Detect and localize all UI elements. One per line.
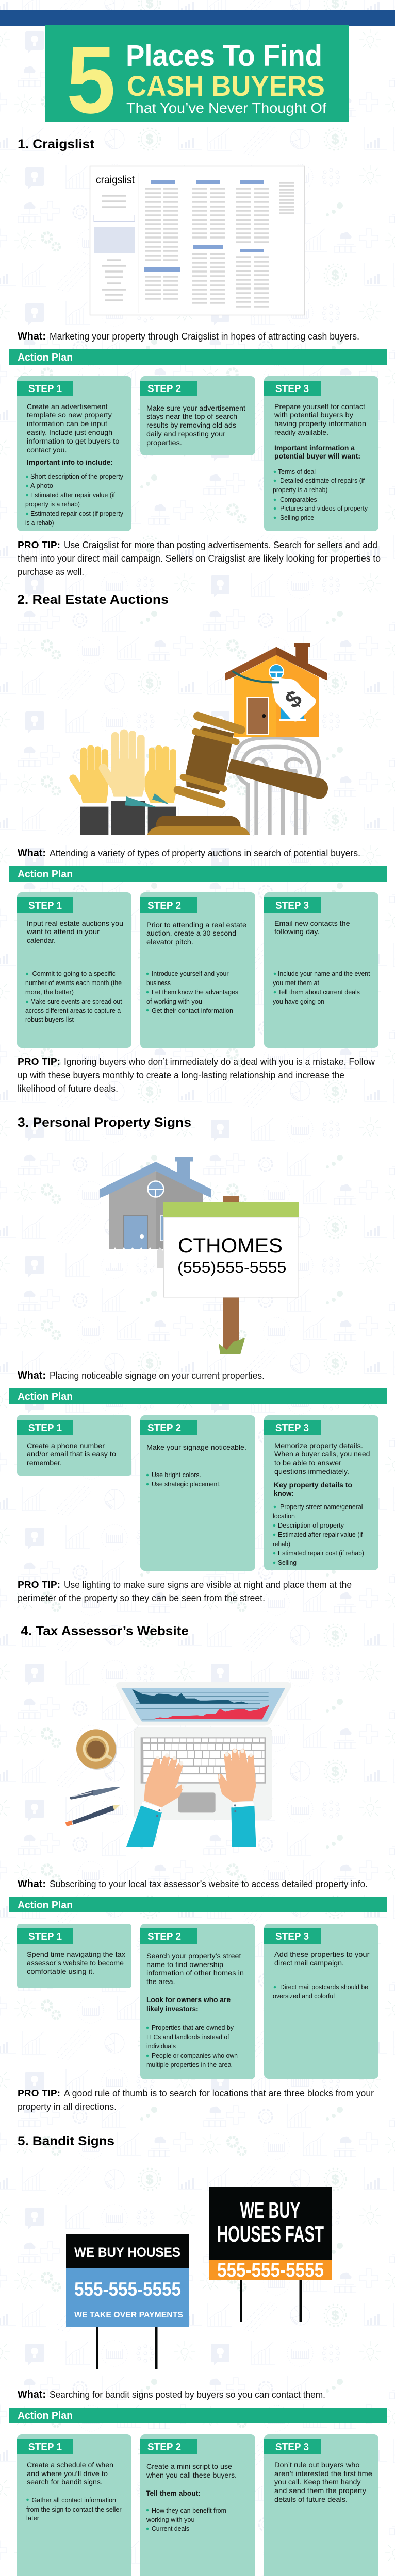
step 2 card: LLCs and landlords instead of	[146, 2033, 229, 2041]
section 5: Bandit Signs	[9, 2134, 387, 2576]
step 3 card: aren’t interested the first time	[274, 2469, 372, 2478]
step 1 card: Input real estate auctions you	[27, 919, 123, 927]
step 3 card	[264, 1924, 378, 2079]
illustration: for-sale style sign: CTHOMES	[178, 1234, 283, 1257]
step 2 card	[140, 2434, 255, 2576]
illustration: bandit sign, we buy houses	[66, 2234, 189, 2369]
action plan bar: Action Plan	[18, 352, 73, 363]
step 1 card: Spend time navigating the tax	[27, 1950, 125, 1958]
step 3 card: STEP 3	[275, 900, 309, 911]
pro tip: PRO TIP:	[18, 2088, 60, 2098]
step 3 card: Pictures and videos of property	[280, 505, 368, 512]
step 3 card: readily available.	[274, 428, 328, 436]
step 3 card: Don’t rule out buyers who	[274, 2461, 360, 2469]
step 2 card: the area.	[146, 1977, 175, 1986]
action plan bar	[9, 2408, 387, 2423]
step 3 card	[264, 1415, 378, 1570]
step 1 card: Short description of the property	[30, 473, 124, 480]
step 3 card: Prepare yourself for contact	[274, 402, 365, 411]
illustration: auction gavel, hands, house on column	[73, 643, 328, 835]
title line: CASH BUYERS: CASH BUYERS	[127, 70, 325, 102]
step 2 card: daily and reposting your	[146, 430, 225, 438]
pro tip: Ignoring buyers who don’t immediately do a deal with you is a mistake. Follow	[64, 1057, 375, 1067]
step 1 card: number of events each month (the	[25, 979, 122, 987]
step 2 card: multiple properties in the area	[146, 2061, 232, 2069]
step 1 card: remember.	[27, 1459, 62, 1467]
step 2 card: stays near the top of search	[146, 412, 237, 420]
step 3 card: questions immediately.	[274, 1467, 349, 1476]
step 1 card: A photo	[30, 482, 53, 489]
step 3 card	[264, 376, 378, 531]
step 3 card: Estimated repair cost (if rehab)	[278, 1550, 364, 1557]
step 1 card: from the sign to contact the seller	[26, 2506, 122, 2513]
step 1 card: more, the better)	[25, 989, 74, 996]
step 1 card: Create an advertisement	[27, 402, 108, 411]
what statement: What:	[18, 331, 46, 342]
action plan bar: Action Plan	[18, 1900, 73, 1911]
step 1 card: and/or email that is easy to	[27, 1450, 116, 1458]
step 3 card: location	[273, 1513, 295, 1520]
step 1 card	[17, 1924, 131, 1988]
step 2 card	[140, 376, 255, 455]
step 1 card: Gather all contact information	[32, 2497, 116, 2504]
step 2 card: How they can benefit from	[152, 2507, 226, 2514]
step 3 card: STEP 3	[275, 383, 309, 395]
step 1 card	[17, 376, 131, 531]
step 3 card: rehab)	[273, 1540, 290, 1548]
step 3 card: you have going on	[273, 998, 324, 1005]
step 3 card: STEP 3	[275, 1931, 309, 1942]
step 2 card: Introduce yourself and your	[152, 970, 229, 977]
pro tip	[18, 2088, 374, 2112]
what statement: Marketing your property through Craigslist in hopes of attracting cash buyers.	[50, 331, 359, 342]
step 2 card: of working with you	[146, 998, 202, 1005]
what statement: What:	[18, 1878, 46, 1890]
step 2 card: Current deals	[152, 2525, 189, 2532]
step 3 card	[264, 2434, 378, 2576]
step 1 card: Create a schedule of when	[27, 2461, 113, 2469]
step 1 card: search for bandit signs.	[27, 2478, 103, 2486]
step 3 card: with potential buyers by	[274, 411, 353, 419]
step 1 card: Estimated after repair value (if	[30, 492, 116, 499]
step 3 card: direct mail campaign.	[274, 1959, 344, 1967]
step 2 card: Make sure your advertisement	[146, 404, 245, 412]
step 3 card: potential buyer will want:	[274, 452, 360, 460]
step 2 card: business	[146, 979, 171, 987]
step 1 card: robust buyers list	[25, 1016, 74, 1023]
step 2 card: Create a mini script to use	[146, 2462, 232, 2470]
illustration: auction gavel, hands, house on column: $	[280, 685, 307, 714]
title line: Places To Find: Places To Find	[126, 39, 322, 73]
pro tip: purchase as well.	[18, 567, 84, 577]
step 2 card: Use strategic placement.	[152, 1481, 221, 1488]
illustration: bandit sign, we buy houses fast: WE BUY	[240, 2198, 300, 2223]
step 1 card: easily. Include just enough	[27, 428, 112, 436]
step 2 card	[140, 892, 255, 1048]
pro tip: perimeter of the property so they can be seen from the street.	[18, 1593, 265, 1603]
step 3 card: Selling	[278, 1559, 297, 1566]
pro tip: A good rule of thumb is to search for locations that are three blocks from your	[64, 2088, 374, 2098]
pro tip	[18, 1056, 375, 1094]
pro tip: Use lighting to make sure signs are visible at night and place them at the	[64, 1580, 352, 1590]
step 3 card: Terms of deal	[278, 468, 316, 476]
step 3 card: Direct mail postcards should be	[280, 1984, 368, 1991]
illustration: laptop, hands, coffee and pens	[65, 1682, 291, 1847]
step 2 card: Let them know the advantages	[152, 989, 238, 996]
illustration: bandit sign, we buy houses: 555-555-5555	[74, 2279, 181, 2300]
step 1 card	[17, 892, 131, 1048]
step 3 card: details of future deals.	[274, 2495, 348, 2503]
section 2: Real Estate Auctions	[9, 592, 387, 1094]
step 2 card: STEP 2	[147, 1931, 181, 1942]
what statement: What:	[18, 1370, 46, 1381]
illustration: bandit sign, we buy houses: WE TAKE OVER PAYMENTS	[74, 2311, 183, 2319]
pro tip	[18, 1579, 352, 1603]
action plan bar: Action Plan	[18, 869, 73, 880]
step 2 card	[140, 1415, 255, 1571]
step 1 card: assessor’s website to become	[27, 1959, 124, 1967]
step 2 card: Prior to attending a real estate	[146, 921, 246, 929]
step 1 card: Important info to include:	[27, 458, 113, 466]
step 3 card: you call. Keep them handy	[274, 2478, 361, 2486]
step 3 card: Tell them about current deals	[278, 989, 360, 996]
step 1 card: later	[26, 2515, 39, 2522]
step 2 card: People or companies who own	[152, 2052, 238, 2059]
step 3 card: Key property details to	[274, 1481, 352, 1489]
step 3 card: Comparables	[280, 496, 317, 503]
step 3 card: Description of property	[278, 1522, 344, 1529]
step 1 card: STEP 1	[28, 1422, 62, 1434]
step 3 card: STEP 3	[275, 2442, 309, 2453]
step 1 card: Make sure events are spread out	[30, 998, 122, 1005]
step 2 card: Use bright colors.	[152, 1471, 201, 1479]
pro tip: property in all directions.	[18, 2102, 117, 2112]
title line: That You've Never Thought Of: That You’ve Never Thought Of	[126, 100, 326, 116]
step 1 card: across different areas to capture a	[25, 1007, 121, 1014]
section 4: Tax Assessor's Website	[9, 1624, 387, 2112]
step 1 card: information to get buyers to	[27, 437, 120, 445]
pro tip: Use Craigslist for more than posting advertisements. Search for sellers and add	[64, 540, 377, 550]
step 1 card: calendar.	[27, 936, 56, 944]
section 3: Personal Property Signs	[9, 1115, 387, 1603]
step 2 card: when you call these buyers.	[146, 2471, 237, 2479]
pro tip	[18, 539, 381, 577]
illustration: bandit sign, we buy houses fast	[209, 2187, 332, 2322]
step 3 card: to be able to answer	[274, 1459, 341, 1467]
step 3 card: know:	[274, 1489, 294, 1497]
action plan bar	[9, 1388, 387, 1404]
step 2 card: STEP 2	[147, 1422, 181, 1434]
step 2 card: Properties that are owned by	[152, 2024, 234, 2031]
step 1 card: STEP 1	[28, 383, 62, 395]
step 3 card: following day.	[274, 927, 320, 936]
illustration: bandit sign, we buy houses fast: 555-555-5555	[217, 2260, 324, 2281]
heading: 4. Tax Assessor's Website: 4. Tax Assessor’s Website	[21, 1624, 189, 1638]
step 3 card: Selling price	[280, 514, 314, 521]
step 2 card: auction, create a 30 second	[146, 929, 236, 937]
action plan bar	[9, 866, 387, 882]
illustration: bandit sign, we buy houses: WE BUY HOUSES	[74, 2245, 180, 2260]
illustration: bandit sign, we buy houses fast: HOUSES FAST	[217, 2222, 324, 2247]
action plan bar: Action Plan	[18, 1391, 73, 1402]
step 2 card: working with you	[146, 2516, 195, 2523]
step 3 card: Memorize property details.	[274, 1442, 363, 1450]
step 1 card: information can be input	[27, 419, 107, 428]
what statement: Placing noticeable signage on your current properties.	[50, 1370, 265, 1381]
step 3 card: STEP 3	[275, 1422, 309, 1434]
step 1 card: and where you’ll drive to	[27, 2469, 108, 2478]
step 3 card: you met them at	[273, 979, 320, 987]
heading: 3. Personal Property Signs: 3. Personal Property Signs	[18, 1115, 191, 1130]
step 2 card: Make your signage noticeable.	[146, 1443, 246, 1451]
step 2 card: Look for owners who are	[146, 1995, 231, 2004]
what statement: Attending a variety of types of property auctions in search of potential buyers.	[50, 848, 360, 858]
title banner	[45, 25, 349, 133]
what statement: What:	[18, 848, 46, 859]
step 3 card: When a buyer calls, you need	[274, 1450, 370, 1458]
step 1 card: comfortable using it.	[27, 1967, 94, 1975]
step 3 card: Estimated after repair value (if	[278, 1531, 363, 1538]
what statement: What:	[18, 2389, 46, 2400]
step 2 card: STEP 2	[147, 900, 181, 911]
pro tip: them into your direct mail campaign. Sellers on Craigslist are likely looking for properties to	[18, 553, 381, 564]
step 2 card: individuals	[146, 2043, 176, 2050]
illustration: gray house	[100, 1157, 211, 1268]
step 3 card: Email new contacts the	[274, 919, 350, 927]
illustration: craigslist web page: craigslist	[96, 174, 135, 186]
step 1 card	[17, 1415, 131, 1476]
step 1 card: Create a phone number	[27, 1442, 105, 1450]
step 1 card: template so new property	[27, 411, 112, 419]
section 1: Craigslist	[9, 137, 387, 577]
step 2 card: properties.	[146, 438, 182, 447]
step 3 card: property is a rehab)	[273, 486, 328, 494]
step 2 card	[140, 1924, 255, 2079]
step 2 card: information of other homes in	[146, 1969, 244, 1977]
step 1 card: STEP 1	[28, 2442, 62, 2453]
step 2 card: Search your property’s street	[146, 1952, 241, 1960]
step 3 card: Detailed estimate of repairs (if	[280, 477, 365, 484]
step 3 card: and send them the property	[274, 2486, 366, 2495]
step 2 card: elevator pitch.	[146, 938, 193, 946]
pro tip: PRO TIP:	[18, 1056, 60, 1067]
action plan bar	[9, 1897, 387, 1912]
step 2 card: Tell them about:	[146, 2489, 201, 2497]
top blue band	[0, 10, 395, 26]
step 2 card: likely investors:	[146, 2005, 198, 2013]
step 3 card: having property information	[274, 419, 366, 428]
what statement: Searching for bandit signs posted by buyers so you can contact them.	[50, 2389, 325, 2400]
action plan bar	[9, 349, 387, 365]
pro tip: likelihood of future deals.	[18, 1083, 118, 1094]
step 1 card: Commit to going to a specific	[32, 970, 116, 977]
step 2 card: Get their contact information	[152, 1007, 233, 1014]
heading: 2. Real Estate Auctions: 2. Real Estate Auctions	[17, 592, 169, 607]
illustration: for-sale style sign	[163, 1196, 299, 1354]
pro tip: PRO TIP:	[18, 539, 60, 550]
step 3 card: oversized and colorful	[273, 1993, 335, 2000]
step 3 card: Add these properties to your	[274, 1950, 370, 1958]
what statement: Subscribing to your local tax assessor’s website to access detailed property info.	[50, 1879, 368, 1889]
step 2 card: STEP 2	[147, 2442, 181, 2453]
step 1 card: STEP 1	[28, 900, 62, 911]
heading: 1. Craigslist: 1. Craigslist	[18, 137, 95, 151]
step 1 card: Estimated repair cost (if property	[30, 510, 124, 517]
step 3 card	[264, 892, 378, 1048]
illustration: for-sale style sign: (555)555-5555	[177, 1259, 287, 1276]
title numeral 5: 5	[67, 27, 116, 133]
pro tip: up with these buyers monthly to create a long-lasting relationship and increase the	[18, 1070, 344, 1080]
step 3 card: Important information a	[274, 444, 355, 452]
step 3 card: Include your name and the event	[278, 970, 370, 977]
step 1 card: property is a rehab)	[25, 501, 80, 508]
step 3 card: Property street name/general	[280, 1503, 363, 1511]
step 1 card: want to attend in your	[26, 927, 100, 936]
step 2 card: results by removing old ads	[146, 421, 236, 429]
step 1 card	[17, 2434, 131, 2576]
step 1 card: STEP 1	[28, 1931, 62, 1942]
step 2 card: name to find ownership	[146, 1960, 223, 1969]
heading: 5. Bandit Signs: 5. Bandit Signs	[18, 2134, 114, 2148]
step 1 card: is a rehab)	[25, 519, 54, 527]
action plan bar: Action Plan	[18, 2410, 73, 2421]
pro tip: PRO TIP:	[18, 1579, 60, 1590]
step 2 card: STEP 2	[147, 383, 181, 395]
illustration: craigslist web page	[90, 166, 304, 315]
step 1 card: contact you.	[27, 446, 67, 454]
